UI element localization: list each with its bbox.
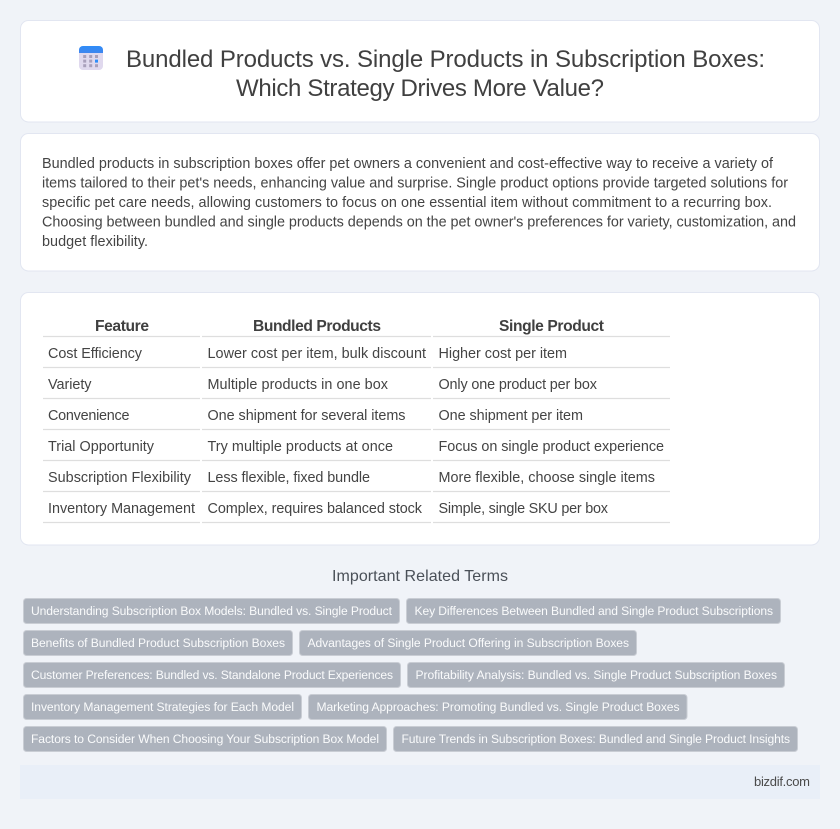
heading: important related terms: Important Related Terms	[332, 568, 508, 585]
table row: inventory management: Simple, single SKU per box	[438, 501, 609, 517]
panel: title card	[20, 20, 820, 122]
table row: cost efficiency	[48, 346, 567, 362]
table row: cost efficiency: Cost Efficiency	[48, 346, 143, 362]
table row: convenience	[48, 408, 583, 424]
title: Bundled Products vs. Single Products in Subscription Boxes:	[126, 46, 765, 73]
tag	[24, 598, 400, 624]
table row: trial opportunity	[48, 439, 664, 455]
footer	[20, 765, 820, 799]
title	[126, 46, 765, 102]
table row: cost efficiency: Lower cost per item, bulk discount	[208, 346, 426, 362]
text block: introduction paragraph: budget flexibility.	[42, 234, 148, 250]
tag	[24, 726, 386, 752]
tag: Profitability Analysis: Bundled vs. Single Product Subscription Boxes	[416, 668, 777, 682]
tag	[24, 630, 292, 656]
tag: Customer Preferences: Bundled vs. Standalone Product Experiences	[31, 668, 393, 682]
panel: comparison table	[20, 292, 820, 545]
table row: trial opportunity: Trial Opportunity	[48, 439, 155, 455]
table row: variety	[48, 377, 598, 393]
table row: trial opportunity: Try multiple products at once	[208, 439, 393, 455]
tag	[406, 598, 780, 624]
table header: Bundled Products	[253, 318, 381, 335]
tag	[24, 694, 302, 720]
table header: Feature	[95, 318, 149, 335]
tag: Inventory Management Strategies for Each Model	[31, 700, 294, 714]
table row: variety: Only one product per box	[438, 377, 598, 393]
table row: convenience: Convenience	[48, 408, 130, 424]
table row: inventory management: Complex, requires balanced stock	[208, 501, 423, 517]
table row: variety: Multiple products in one box	[208, 377, 389, 393]
tag	[300, 630, 636, 656]
table row: convenience: One shipment per item	[438, 408, 583, 424]
table row: subscription flexibility: Less flexible, fixed bundle	[208, 470, 370, 486]
text block: introduction paragraph: items tailored to their pet's needs, enhancing value and surprise. Single product options provide targeted solutions for	[42, 176, 788, 192]
text block: introduction paragraph: Choosing between bundled and single products depends on the pet owner's preferences for variety, customization, and	[42, 214, 796, 230]
text block: introduction paragraph: Bundled products in subscription boxes offer pet owners a convenient and cost-effective way to receive a variety of	[42, 156, 774, 172]
text block: introduction paragraph	[42, 156, 796, 250]
tag: Advantages of Single Product Offering in Subscription Boxes	[308, 636, 629, 650]
tag: Future Trends in Subscription Boxes: Bundled and Single Product Insights	[402, 732, 790, 746]
tag	[308, 694, 687, 720]
tag: Factors to Consider When Choosing Your Subscription Box Model	[31, 732, 379, 746]
table header: Single Product	[499, 318, 604, 335]
table row: variety: Variety	[48, 377, 92, 393]
icon: calendar	[79, 46, 103, 70]
table row: subscription flexibility: Subscription Flexibility	[48, 470, 192, 486]
footer: bizdif.com	[754, 774, 810, 789]
table row: subscription flexibility: More flexible, choose single items	[438, 470, 655, 486]
panel: introduction	[20, 134, 820, 271]
tag list: related terms	[24, 598, 798, 752]
table row: subscription flexibility	[48, 470, 655, 486]
tag	[394, 726, 798, 752]
text block: introduction paragraph: specific pet care needs, allowing customers to focus on one essential item without commitment to a recurring box.	[42, 195, 772, 211]
table row: inventory management	[48, 501, 609, 517]
table row: trial opportunity: Focus on single product experience	[438, 439, 664, 455]
tag	[408, 662, 784, 688]
table header	[95, 318, 604, 335]
table row: inventory management: Inventory Management	[48, 501, 195, 517]
table row: cost efficiency: Higher cost per item	[438, 346, 567, 362]
title: Which Strategy Drives More Value?	[236, 75, 604, 102]
tag	[24, 662, 400, 688]
table row: convenience: One shipment for several items	[208, 408, 406, 424]
tag: Marketing Approaches: Promoting Bundled vs. Single Product Boxes	[316, 700, 680, 714]
tag: Understanding Subscription Box Models: Bundled vs. Single Product	[31, 604, 393, 618]
tag: Key Differences Between Bundled and Single Product Subscriptions	[414, 604, 773, 618]
tag: Benefits of Bundled Product Subscription Boxes	[31, 636, 285, 650]
